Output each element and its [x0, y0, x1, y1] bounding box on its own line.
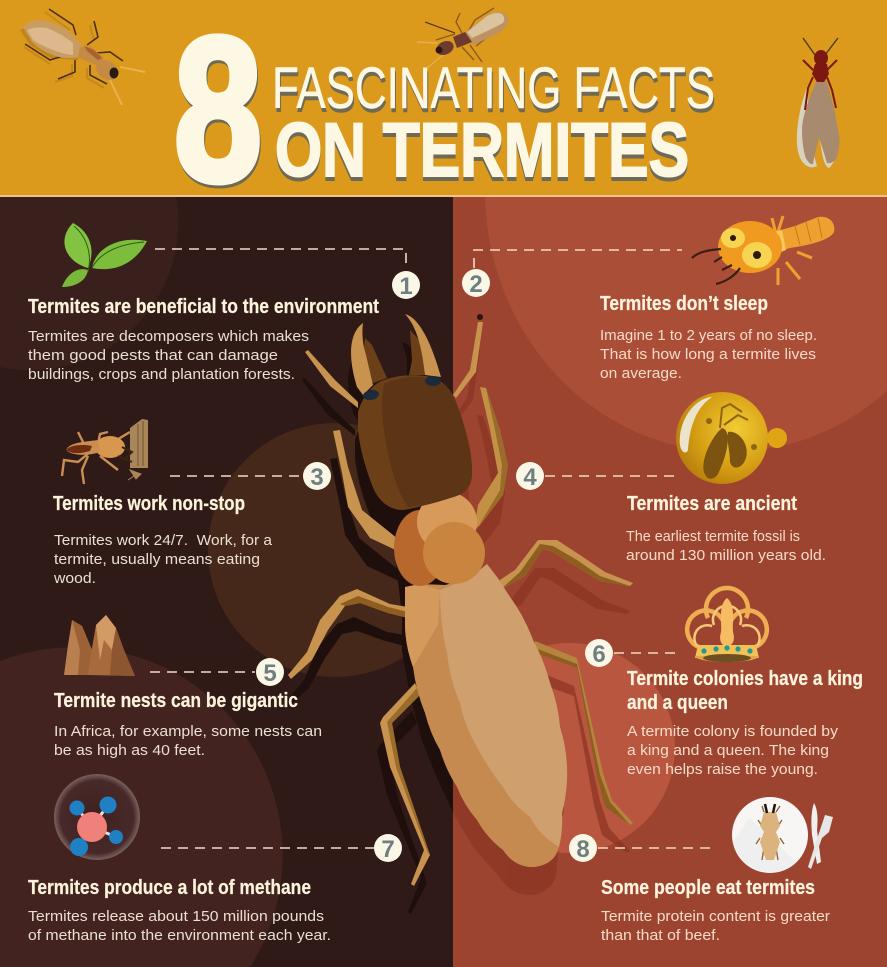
body text: them good pests that can damage: [28, 348, 278, 364]
body text: [600, 328, 817, 382]
number badge 5: 5: [263, 660, 277, 687]
fact 4: [516, 392, 826, 564]
body text: Termites work 24/7. Work, for a: [54, 533, 273, 549]
heading: Some people eat termites: [601, 877, 815, 899]
body text: [28, 329, 309, 383]
panel: left background: [0, 197, 403, 967]
number badge 7: [374, 834, 402, 863]
body text: a king and a queen. The king: [627, 743, 829, 759]
abdomen: [405, 564, 567, 867]
fact 1: [28, 223, 420, 383]
number badge 3: [303, 462, 331, 491]
icon: orange termite: [692, 216, 834, 285]
divider line under header: [0, 195, 887, 197]
body text: [601, 909, 830, 944]
body text: The earliest termite fossil is: [626, 529, 800, 545]
fact 2: [462, 216, 834, 382]
heading: Termites are ancient: [627, 493, 797, 515]
body text: [53, 533, 273, 587]
icon: header termite left: [20, 9, 145, 105]
body text: wood.: [53, 571, 96, 587]
fact 5: [54, 615, 322, 759]
title numeral 8: 8: [175, 0, 263, 227]
main termite illustration: [288, 314, 633, 886]
icon: termite on plate: [732, 797, 833, 873]
number badge 1: [392, 271, 420, 300]
termite shadow right: [453, 350, 630, 895]
body text: A termite colony is founded by: [627, 724, 839, 740]
title line 2: ON TERMITES: [275, 112, 689, 197]
number badge 6: 6: [592, 641, 606, 668]
body text: termite, usually means eating: [54, 552, 260, 568]
number badge 1: 1: [399, 273, 413, 300]
panel: right background: [453, 196, 887, 967]
body text: [626, 529, 826, 564]
number badge 8: [569, 834, 597, 863]
title line 2: ON TERMITES: [275, 108, 689, 193]
body text: on average.: [600, 366, 682, 382]
icon: leaves: [62, 223, 147, 287]
heading: Termites are beneficial to the environment: [28, 296, 379, 318]
body text: Termite protein content is greater: [601, 909, 830, 925]
title line 1: FASCINATING FACTS: [273, 60, 716, 125]
number badge 7: 7: [381, 836, 395, 863]
icon: methane molecule: [54, 774, 140, 860]
icon: termite chewing wood: [62, 419, 148, 484]
body text: around 130 million years old.: [626, 548, 826, 564]
number badge 6: [585, 639, 613, 668]
title numeral 8: 8: [174, 0, 262, 224]
body text: [28, 909, 331, 944]
header background: [0, 0, 887, 195]
number badge 4: [516, 462, 544, 491]
body text: Termites release about 150 million pounds: [28, 909, 324, 925]
icon: header termite middle: [417, 8, 508, 68]
body text: buildings, crops and plantation forests.: [28, 367, 295, 383]
icon: crown: [687, 588, 767, 662]
body text: even helps raise the young.: [627, 762, 818, 778]
number badge 5: [256, 658, 284, 687]
body text: [627, 724, 839, 778]
heading: Termites work non-stop: [53, 493, 245, 515]
body text: be as high as 40 feet.: [54, 743, 205, 759]
heading: [627, 668, 863, 714]
body text: In Africa, for example, some nests can: [54, 724, 322, 740]
mandibles: [351, 314, 441, 395]
icon: amber fossil: [676, 392, 787, 484]
fact 6: [585, 588, 863, 778]
icon: termite nests: [64, 615, 135, 676]
number badge 2: [462, 269, 490, 298]
number badge 2: 2: [469, 271, 483, 298]
fact 8: [569, 797, 833, 944]
legs: [288, 387, 633, 886]
title line 1: FASCINATING FACTS: [272, 56, 715, 121]
head: [358, 375, 472, 510]
heading: Termites produce a lot of methane: [28, 877, 311, 899]
fact 7: [28, 774, 402, 944]
heading: Termite nests can be gigantic: [54, 690, 298, 712]
icon: header termite right: [797, 38, 839, 168]
body text: Termites are decomposers which makes: [28, 329, 309, 345]
body text: of methane into the environment each year.: [28, 928, 331, 944]
heading: Termites don’t sleep: [600, 293, 768, 315]
body text: [54, 724, 322, 759]
number badge 3: 3: [310, 464, 324, 491]
thorax: [394, 492, 485, 586]
body text: than that of beef.: [601, 928, 720, 944]
antennae: [305, 314, 483, 408]
fact 3: [53, 419, 331, 587]
title: [174, 0, 716, 227]
body text: Imagine 1 to 2 years of no sleep.: [600, 328, 817, 344]
heading: and a queen: [627, 692, 728, 714]
body text: That is how long a termite lives: [600, 347, 816, 363]
number badge 8: 8: [576, 836, 590, 863]
termite shadow left: [288, 342, 453, 914]
number badge 4: 4: [523, 464, 537, 491]
